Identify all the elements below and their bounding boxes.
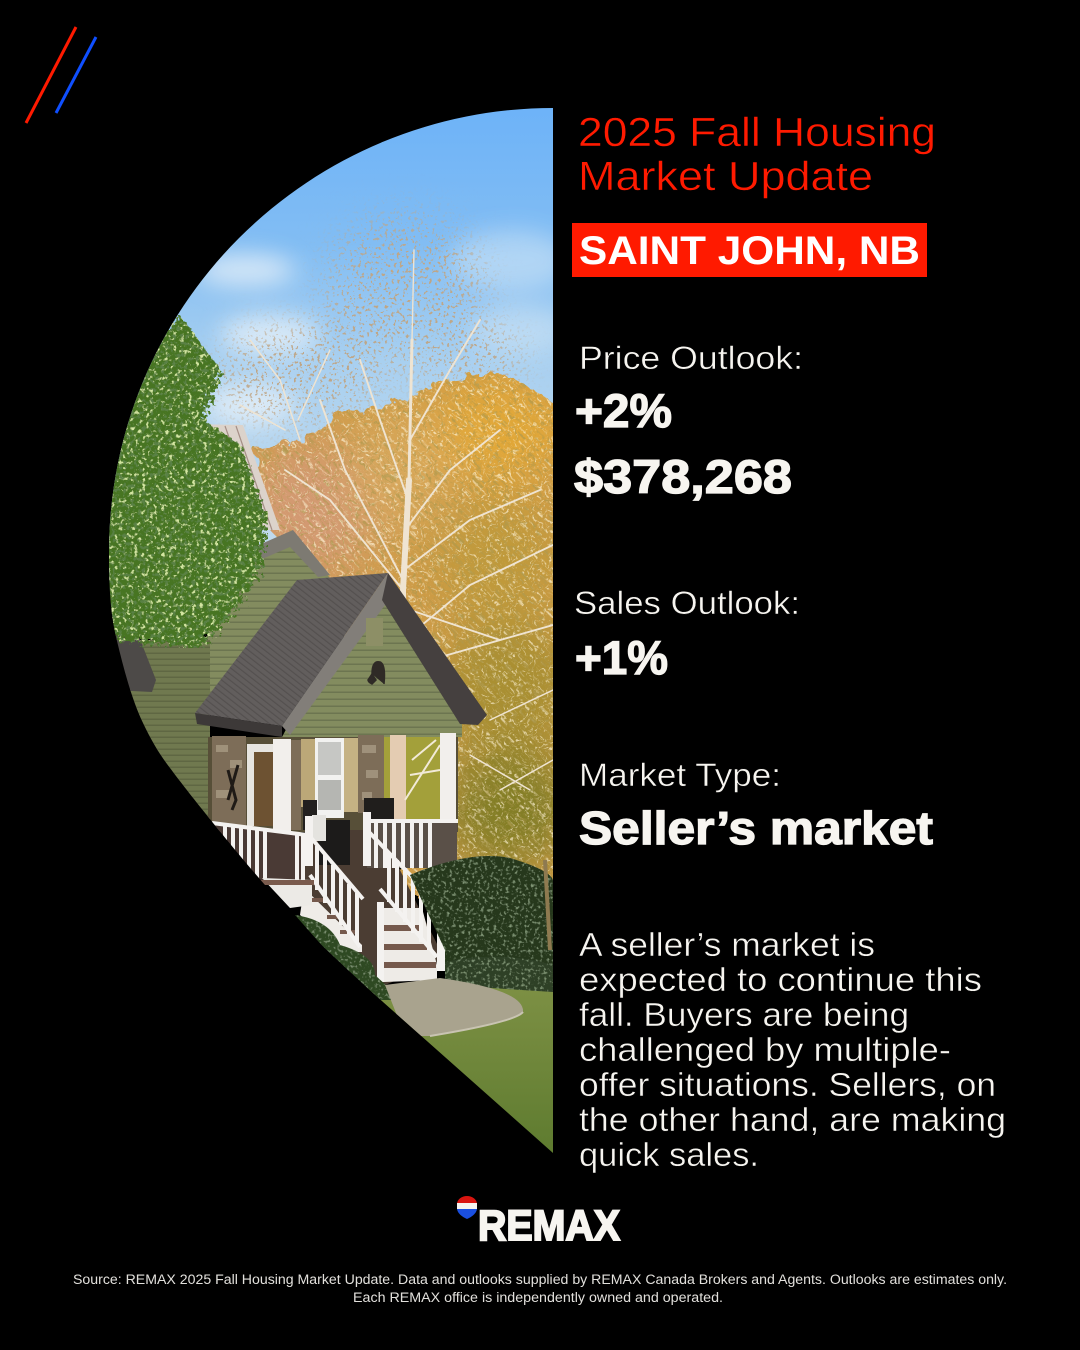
porch and stair railings [212,821,458,957]
price outlook: Price Outlook: [579,340,803,376]
icon: balloon [457,1196,477,1219]
stone walls [212,735,384,831]
door [247,744,273,826]
sales outlook: +1% [575,631,668,684]
location badge: SAINT JOHN, NB [579,229,920,273]
window and shutters [301,738,358,818]
shrubs and ferns [410,856,553,965]
gable vent and lamp [366,618,384,684]
market description: quick sales. [579,1136,759,1173]
price outlook [574,340,803,503]
title: 2025 Fall Housing [578,109,936,155]
birch tree trunk and branches [240,250,553,790]
porch furniture [303,798,394,865]
sales outlook [574,585,800,684]
decorative red and blue slashes [26,27,96,123]
market description [579,926,1006,1173]
roof fascia [195,713,282,737]
steps [300,888,437,982]
metal roof [195,573,388,726]
autumn trees [250,370,553,898]
rail posts [305,812,446,982]
stone path [385,978,523,1036]
source footnote: Source: REMAX 2025 Fall Housing Market Update. Data and outlooks supplied by REMAX Canada Brokers and Agents. Outlooks are estimates only. [73,1272,1007,1287]
tree trunk right [545,860,550,950]
lower left wall [130,640,210,830]
right eave [382,573,487,725]
porch columns [273,733,456,831]
back wall and gable [207,547,330,694]
market description: expected to continue this [579,961,982,998]
market description: the other hand, are making [579,1101,1006,1138]
clouds [195,230,570,427]
market type [579,757,933,854]
small side roof [112,632,156,692]
stair well floor [300,830,445,985]
front gable wall [282,596,462,737]
market description: challenged by multiple- [579,1031,951,1068]
title [578,109,936,199]
source footnote: Each REMAX office is independently owned and operated. [353,1290,723,1305]
photo: house in autumn inside a location pin shape [109,108,553,1153]
grass lawn [364,985,553,1153]
tree seen through porch [384,737,440,819]
market type: Market Type: [579,757,781,793]
market type: Seller’s market [579,802,933,854]
price outlook: +2% [575,384,672,437]
pale back roof [211,424,280,530]
price outlook: $378,268 [574,450,792,503]
logo: REMAX: REMAX [478,1202,620,1250]
porch shadow back [208,737,458,832]
source footnote [73,1272,1007,1305]
brown leaf specks on bare tree [215,215,525,425]
sky [100,100,553,580]
dark under-rail [216,826,301,880]
market description: fall. Buyers are being [579,996,909,1033]
porch base [262,878,312,908]
green tree [100,315,268,648]
market description: A seller’s market is [579,926,875,963]
sales outlook: Sales Outlook: [574,585,800,621]
title: Market Update [578,153,873,199]
market description: offer situations. Sellers, on [579,1066,996,1103]
